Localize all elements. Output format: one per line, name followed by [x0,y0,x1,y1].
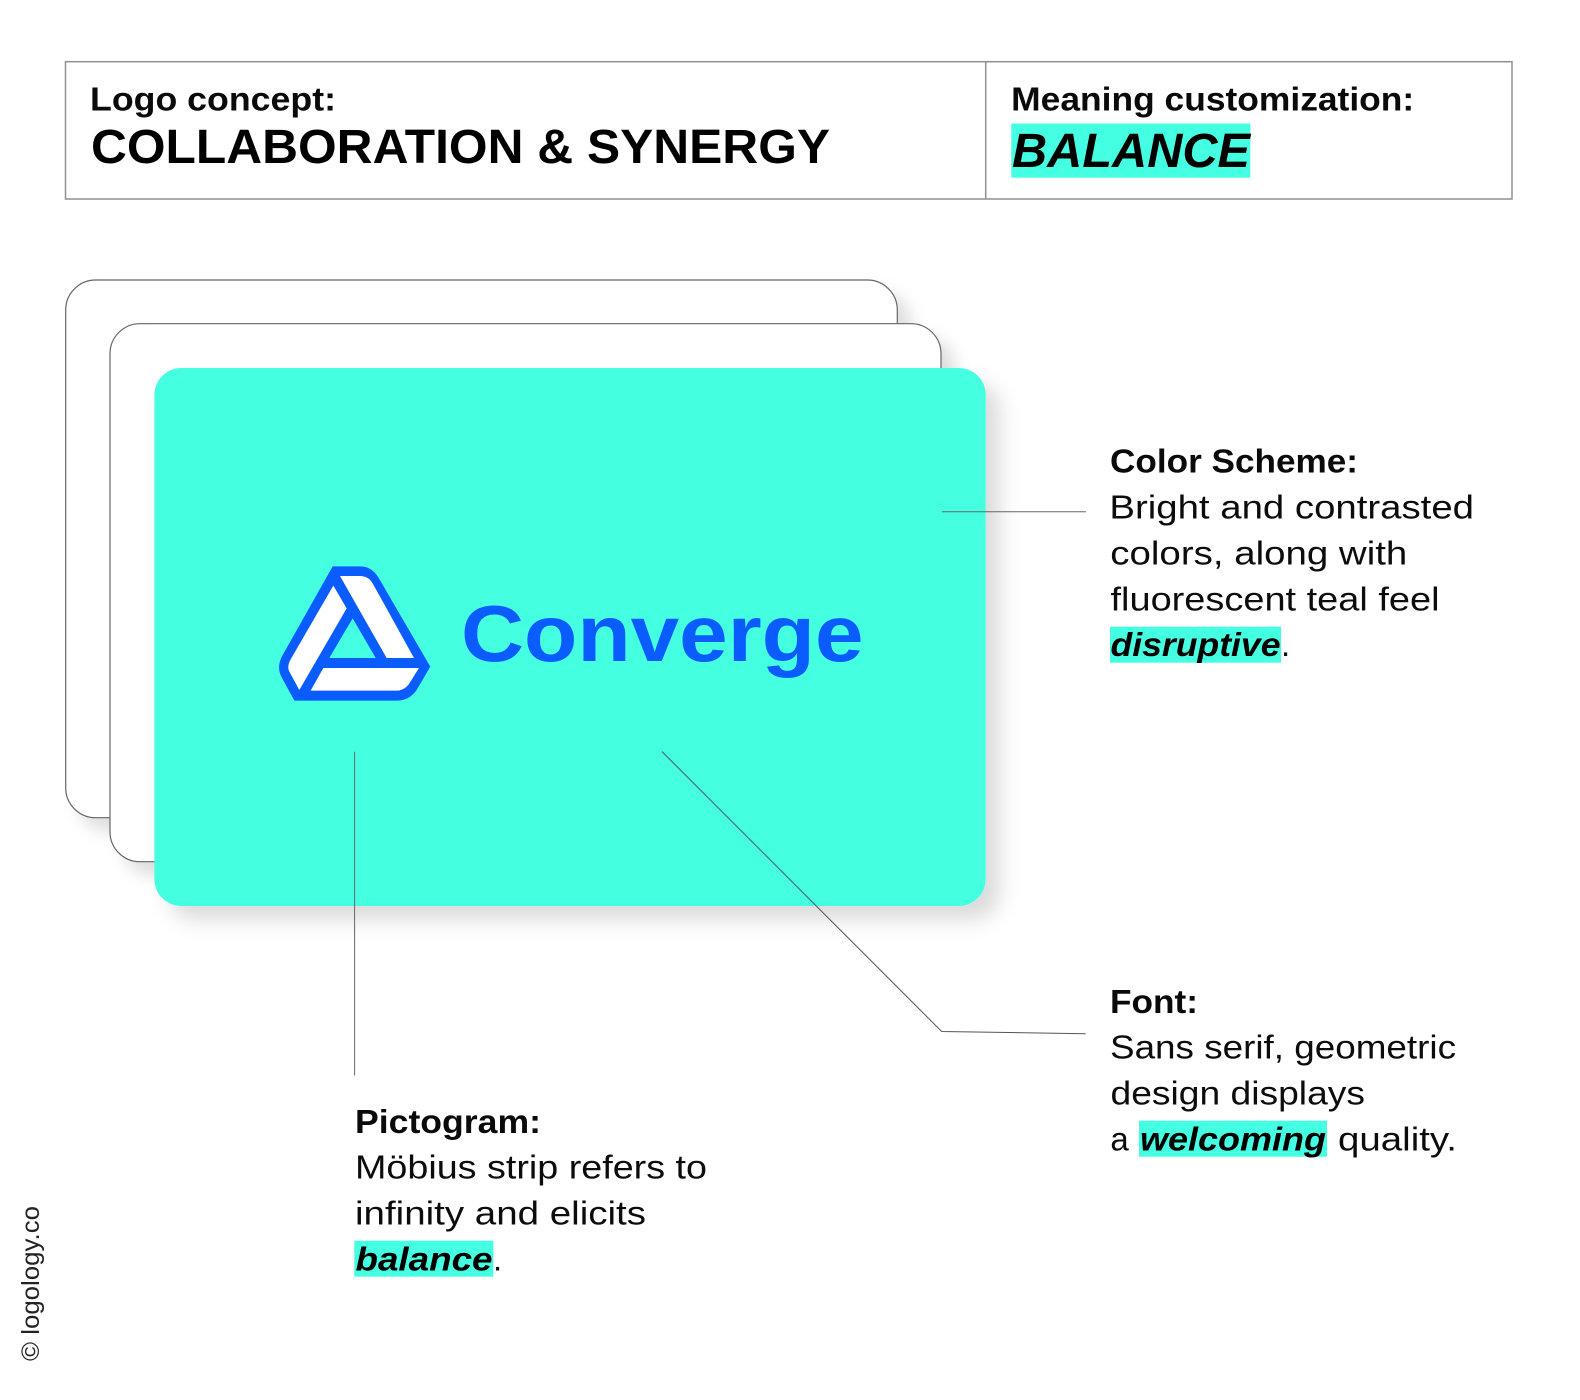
text block: font: design displays [1110,1074,1365,1111]
card stack [66,280,986,906]
text block: pictogram: Möbius strip refers to [355,1148,707,1185]
text block: font: welcoming [1140,1120,1326,1158]
text block: pictogram: infinity and elicits [355,1194,646,1231]
heading: meaning customization [1011,80,1414,178]
text block: color scheme: Color Scheme: [1110,442,1358,479]
copyright credit: © logology.co [17,1206,45,1361]
leader line: pictogram [354,752,356,1076]
text block: font: a [1110,1120,1129,1158]
text block: pictogram: . [493,1240,502,1278]
icon: mobius strip triangle [279,566,430,701]
text block: color scheme [1109,442,1474,663]
header panel [66,61,1512,199]
heading: logo concept [90,80,830,174]
heading: logo concept: COLLABORATION & SYNERGY [91,121,830,174]
text block: pictogram [354,1103,707,1278]
logo wordmark: Converge [461,589,864,678]
heading: logo concept: Logo concept: [90,80,336,117]
text block: color scheme: . [1281,626,1290,663]
text block: pictogram: balance [356,1240,492,1278]
text block: font [1110,983,1457,1158]
text block: color scheme: disruptive [1110,626,1280,663]
leader line: font [662,752,1086,1034]
text block: pictogram: Pictogram: [355,1103,541,1140]
text block: color scheme: colors, along with [1110,534,1407,571]
heading: meaning customization: Meaning customization: [1011,80,1414,118]
text block: color scheme: Bright and contrasted [1109,488,1474,525]
text block: color scheme: fluorescent teal feel [1110,580,1440,618]
text block: font: Font: [1110,983,1198,1020]
text block: font: quality. [1338,1120,1457,1158]
heading: meaning customization: BALANCE [1012,125,1252,178]
text block: font: Sans serif, geometric [1110,1028,1456,1065]
leader line: color scheme [942,511,1086,513]
